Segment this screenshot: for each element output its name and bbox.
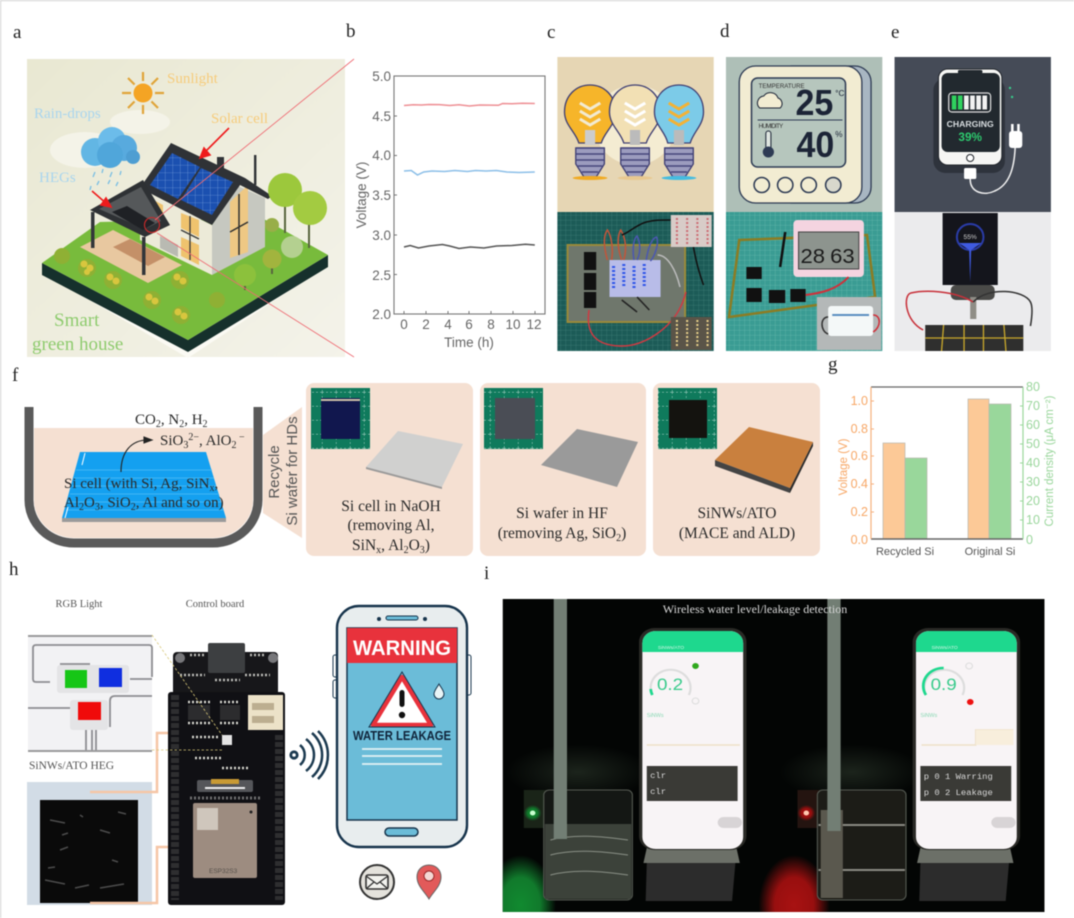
right axis: 80: [1026, 380, 1040, 394]
card: Si wafer in HF: [480, 383, 646, 556]
card: Si wafer in HF: 2: [616, 533, 621, 544]
scene: low water level: [485, 599, 746, 918]
panel labels: i: [484, 563, 489, 584]
panel labels: g: [828, 354, 838, 375]
phone warning screen: [333, 606, 471, 847]
icon: hygrometer device: 25: [795, 82, 833, 123]
beaker text: ,: [214, 476, 218, 492]
card: Si cell in NaOH: SiN: [352, 537, 376, 554]
icon: phone charging: CHARGING: [947, 119, 994, 129]
icon: blue bulb: [654, 85, 703, 180]
card: Si cell in NaOH: Si cell in NaOH: [341, 498, 441, 515]
beaker text: , N: [161, 412, 179, 428]
illustration labels: HEGs: [39, 170, 76, 186]
scene: low water level: SiNWs: [647, 713, 664, 719]
beaker text: 3: [183, 440, 188, 451]
x axis labels: 0: [400, 317, 408, 332]
icon: hygrometer device: HUMIDITY: [759, 124, 783, 130]
card: Si wafer in HF: (removing Ag, SiO: [498, 525, 616, 542]
panel labels: b: [346, 21, 356, 42]
icon: hygrometer device: °C: [835, 89, 845, 98]
right axis: 20: [1026, 494, 1040, 508]
illustration labels: [32, 71, 268, 355]
icon: location pin: [417, 865, 441, 899]
panel labels: [9, 21, 899, 584]
card: SiNWs/ATO: (MACE and ALD): [679, 525, 795, 542]
hygrometer circuit photo: 28: [801, 246, 825, 268]
panel a: smart green house illustration: [27, 59, 354, 358]
icon: cream bulb: [609, 85, 661, 180]
right axis: 50: [1026, 437, 1040, 451]
scene: high water level leakage: SiNWs/ATO: [931, 645, 958, 651]
x axis labels: 6: [465, 317, 473, 332]
sub-labels: RGB Light: [56, 599, 103, 610]
illustration labels: green house: [32, 334, 123, 355]
card: Si wafer in HF: Si wafer in HF: [516, 505, 608, 522]
panel b: voltage vs time line chart: [354, 69, 545, 350]
panel labels: h: [9, 559, 19, 580]
card: Si cell in NaOH: 2: [404, 545, 409, 556]
icon: warning triangle: [369, 672, 435, 727]
ground platform: [42, 218, 328, 358]
control board: ESP32S3: [209, 868, 238, 875]
left axis: 0.0: [851, 533, 868, 547]
icon: rain cloud: [81, 127, 140, 190]
category labels: Original Si: [965, 546, 1015, 558]
icon: sun: [122, 72, 164, 114]
icon: hygrometer device: [739, 66, 871, 203]
y axis labels: 2.5: [372, 268, 391, 283]
recycle funnel: Si wafer for HDs: [284, 416, 301, 526]
scene: high water level leakage: p 0 1 Warring: [924, 772, 993, 782]
phone charging photo: 55%: [964, 234, 977, 241]
axes: [871, 387, 1023, 539]
scene: low water level: SiNWs/ATO: [658, 645, 685, 651]
scene: high water level leakage: p 0 2 Leakage: [924, 788, 993, 798]
RGB light circuit: [28, 635, 152, 752]
card: Si cell in NaOH: ): [425, 537, 430, 554]
scene: low water level: clr: [650, 771, 666, 781]
icon: hygrometer device: 40: [796, 124, 834, 165]
icon: mail: [360, 865, 394, 899]
panel g: voltage and current density bar chart: [838, 380, 1056, 558]
beaker text: , H: [184, 412, 203, 428]
bushes: [54, 248, 225, 324]
card: Si wafer in HF: ): [621, 525, 626, 542]
x axis labels: 2: [422, 317, 430, 332]
beaker text: Al: [64, 495, 79, 511]
hygrometer circuit photo: 63: [830, 246, 855, 268]
left axis: 0.8: [851, 422, 868, 436]
y axis labels: 4.5: [372, 109, 391, 124]
beaker liquid: [34, 428, 253, 538]
right axis: Current density (μA cm⁻²): [1044, 395, 1056, 526]
zoom circle and projection lines: [144, 59, 354, 357]
bars: [883, 399, 1011, 539]
phone warning screen: WARNING: [353, 637, 451, 660]
left axis: 0.2: [851, 505, 868, 519]
control board: [168, 643, 285, 905]
panel d: thermometer hygrometer: [726, 57, 882, 351]
right axis: 30: [1026, 475, 1040, 489]
beaker wall: [29, 407, 258, 543]
right axis: 70: [1026, 399, 1040, 413]
card: Si cell in NaOH: O: [409, 537, 420, 554]
series: black line: [404, 244, 535, 248]
category labels: [876, 546, 1015, 558]
beaker text: [64, 412, 245, 513]
panel i: water level detection photo: [485, 599, 1044, 918]
card: Si cell in NaOH: , Al: [381, 537, 404, 554]
phone charging photo: [895, 212, 1051, 351]
beaker text: SiO: [160, 433, 183, 449]
x axis labels: Time (h): [444, 335, 494, 350]
panel labels: a: [13, 22, 22, 43]
beaker text: , SiO: [100, 495, 131, 511]
left axis: Voltage (V): [838, 438, 850, 495]
sub-labels: [29, 599, 245, 772]
red arrows: [92, 128, 229, 207]
x axis labels: 12: [526, 317, 542, 332]
right axis: [1026, 380, 1056, 547]
curved arrow: [121, 437, 152, 472]
panel labels: d: [720, 21, 730, 42]
scene: high water level leakage: [759, 599, 1020, 918]
card: SiNWs/ATO: [653, 383, 820, 556]
category labels: Recycled Si: [876, 546, 934, 558]
scene: low water level: clr: [650, 787, 666, 797]
scene: high water level leakage: 0.9: [931, 675, 957, 694]
card: SiNWs/ATO: SiNWs/ATO: [698, 505, 776, 522]
beaker text: , AlO: [199, 433, 232, 449]
y axis title: Voltage (V): [354, 162, 369, 228]
illustration labels: Solar cell: [211, 111, 268, 127]
left axis: [838, 394, 868, 547]
y axis labels: [372, 69, 391, 322]
beaker text: 2: [79, 502, 84, 513]
right axis: 0: [1026, 533, 1033, 547]
card: Si cell in NaOH: x: [376, 545, 381, 556]
solar panels on roof: [150, 153, 233, 215]
panel labels: f: [12, 365, 19, 386]
beaker text: 2: [131, 502, 136, 513]
series: red line: [404, 103, 535, 106]
recycle funnel: [263, 407, 302, 538]
left axis: 1.0: [851, 394, 868, 408]
panel h: wireless warning system: [27, 599, 471, 905]
icon: hygrometer device: %: [835, 130, 843, 139]
right axis: 40: [1026, 456, 1040, 470]
title: Wireless water level/leakage detection: [663, 602, 847, 616]
beaker text: −: [236, 432, 245, 443]
panel f: Si recycling process: [29, 383, 820, 556]
LED breadboard photo: [557, 212, 714, 351]
panel c: light bulbs and LED demo: [557, 57, 714, 351]
card: Si cell in NaOH: 3: [420, 545, 425, 556]
series lines: [404, 103, 535, 248]
icon: phone charging: 39%: [958, 131, 983, 144]
icon: phone charging: [939, 69, 1022, 193]
beaker text: 2: [232, 440, 236, 451]
silicon cell: [62, 452, 226, 522]
icon: hygrometer device: TEMPERATURE: [759, 84, 805, 90]
dashed guide lines: [152, 635, 222, 750]
panel labels: e: [891, 22, 899, 43]
icon: water drop: [434, 684, 444, 699]
y axis labels: 3.0: [372, 228, 391, 243]
series: blue line: [404, 170, 535, 175]
sub-labels: SiNWs/ATO HEG: [29, 760, 114, 772]
illustration labels: Rain-drops: [34, 106, 101, 122]
card: Si cell in NaOH: [306, 383, 473, 556]
phone warning screen: WATER LEAKAGE: [353, 729, 451, 743]
beaker text: , Al and so on): [136, 495, 224, 511]
right axis: 10: [1026, 513, 1040, 527]
y axis labels: 2.0: [372, 307, 391, 322]
connecting wires: [90, 733, 175, 903]
icon: yellow bulb: [565, 85, 616, 180]
x axis labels: 8: [487, 317, 495, 332]
beaker text: 2: [179, 419, 184, 430]
beaker text: CO: [135, 412, 156, 428]
left axis: 0.4: [851, 477, 868, 491]
y axis labels: 3.5: [372, 188, 391, 203]
right axis: 60: [1026, 418, 1040, 432]
beaker text: 2: [156, 419, 161, 430]
house walls: [140, 185, 265, 275]
x axis labels: 4: [444, 317, 452, 332]
panel labels: c: [547, 22, 555, 43]
icon: wifi signal: [291, 731, 328, 779]
scene: high water level leakage: SiNWs: [920, 713, 938, 719]
trees: [234, 173, 327, 290]
y axis labels: 5.0: [372, 69, 391, 84]
illustration labels: Smart: [54, 310, 100, 331]
left axis: 0.6: [851, 449, 868, 463]
beaker text: 2: [203, 419, 208, 430]
beaker text: Si cell (with Si, Ag, SiN: [64, 476, 209, 492]
y axis labels: 4.0: [372, 148, 391, 163]
beaker text: O: [84, 495, 95, 511]
recycle funnel: Recycle: [266, 445, 283, 499]
HEG photo: [27, 782, 152, 905]
panel e: phone charging: [895, 57, 1051, 351]
beaker text: 2−: [188, 432, 199, 443]
porch with HEG panel: [90, 180, 170, 275]
roof: [140, 143, 245, 225]
beaker text: x: [209, 483, 214, 494]
x axis labels: 10: [505, 317, 521, 332]
card: Si cell in NaOH: (removing Al,: [348, 517, 434, 534]
illustration labels: Sunlight: [167, 71, 219, 87]
x axis labels: [400, 317, 542, 350]
hygrometer circuit photo: [726, 212, 882, 351]
sub-labels: Control board: [186, 599, 245, 610]
deck: [80, 230, 182, 283]
beaker text: 3: [95, 502, 100, 513]
scene: low water level: 0.2: [657, 675, 683, 694]
